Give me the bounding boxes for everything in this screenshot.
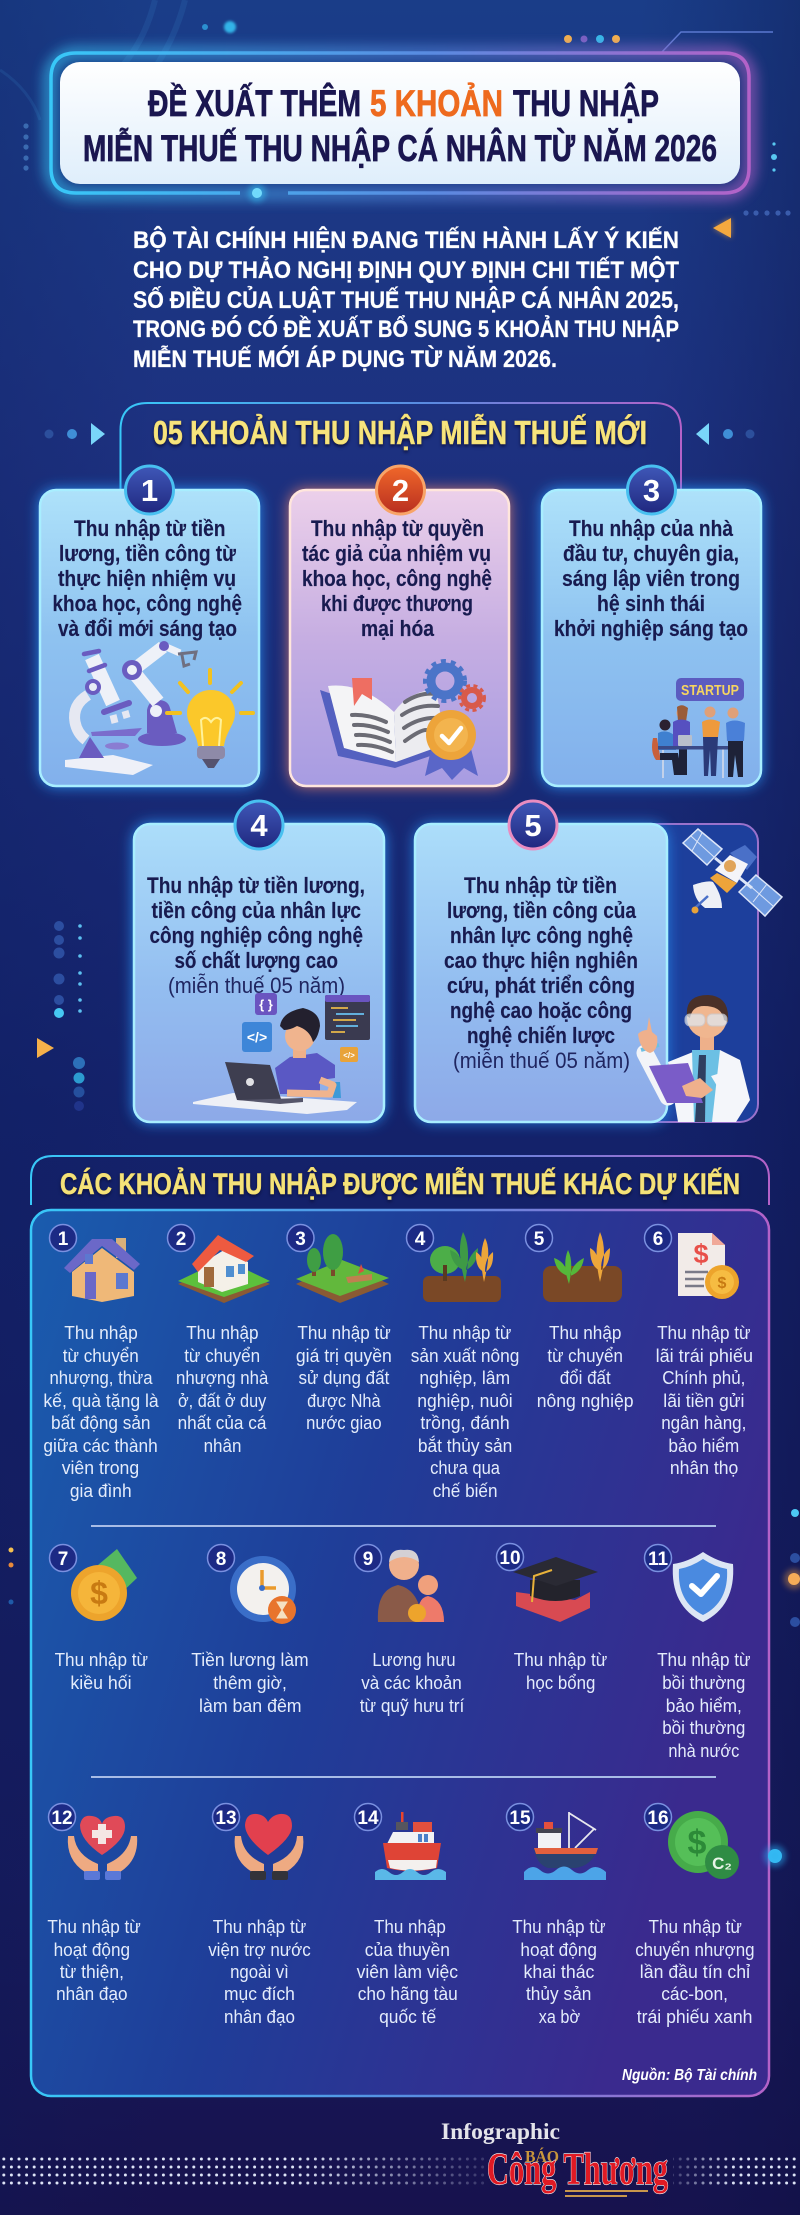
badge 5: 5 [524, 808, 542, 843]
text [176, 1323, 269, 1456]
icon: programmer at laptop: { } [259, 997, 273, 1012]
icon: programmer at laptop: </> [343, 1051, 355, 1060]
text 3: đầu tư, chuyên gia, [563, 541, 739, 566]
icon: left arrow marker [44, 423, 105, 445]
text: làm ban đêm [199, 1696, 302, 1716]
decorative dots, left of row 2 [37, 921, 85, 1111]
number 1: 1 [58, 1229, 69, 1250]
icon: ship on waves [375, 1812, 446, 1880]
number 2 [168, 1224, 194, 1252]
text [411, 1323, 519, 1501]
text: hoạt động [520, 1940, 597, 1960]
text 2: mại hóa [361, 616, 435, 641]
badge 1: 1 [141, 473, 158, 508]
icon: right arrow marker [696, 423, 754, 445]
decorative lines and dots, top area [0, 0, 791, 216]
icon: document with coin: $ [718, 1275, 727, 1292]
number 12 [48, 1804, 76, 1830]
text: xa bờ [539, 2007, 580, 2027]
text: chưa qua [430, 1458, 501, 1478]
text: Thu nhập từ [213, 1917, 306, 1937]
text: Thu nhập [374, 1917, 446, 1937]
logo: Báo Công Thương [487, 2143, 668, 2197]
text: sử dụng đất [298, 1368, 389, 1388]
text: khai thác [524, 1962, 594, 1982]
text 5: nghệ chiến lược [467, 1023, 615, 1048]
text: từ chuyển [63, 1346, 139, 1366]
text: Thu nhập từ [657, 1323, 750, 1343]
icon: shield with check [673, 1552, 733, 1622]
text [514, 1650, 607, 1693]
text: kiều hối [70, 1673, 132, 1693]
text [47, 1917, 141, 2004]
text 4: số chất lượng cao [174, 948, 338, 973]
text: Thu nhập [64, 1323, 138, 1343]
heading: 05 new exemptions: 05 KHOẢN THU NHẬP MIỄN THUẾ MỚI [153, 414, 647, 451]
icon: pensioners with coin [378, 1550, 444, 1622]
item 7 [50, 1544, 148, 1693]
text: cho hãng tàu [358, 1984, 458, 2004]
icon: scientist [638, 995, 750, 1122]
text: giá trị quyền [296, 1346, 392, 1366]
text 1 [52, 516, 242, 641]
text 4: công nghiệp công nghệ [150, 923, 363, 948]
item 9 [354, 1544, 464, 1716]
panel: exemption 1 [39, 466, 260, 787]
text: nhân đạo [224, 2007, 295, 2027]
number 9 [354, 1544, 382, 1572]
text: từ chuyển [184, 1346, 260, 1366]
text: nhân [204, 1436, 241, 1456]
text: nhượng, thừa [50, 1368, 153, 1388]
item 15 [506, 1804, 606, 2027]
text: Thu nhập từ [55, 1650, 148, 1670]
icon: land with trees [296, 1234, 389, 1303]
text: ở, đất ở duy [178, 1391, 266, 1411]
intro paragraph: BỘ TÀI CHÍNH HIỆN ĐANG TIẾN HÀNH LẤY Ý KIẾN [133, 226, 679, 254]
text: mục đích [224, 1984, 295, 2004]
number 8 [208, 1544, 234, 1572]
text 2: tác giả của nhiệm vụ [302, 541, 491, 566]
number 16 [644, 1804, 672, 1830]
text 3: Thu nhập của nhà [569, 516, 734, 541]
text: từ quỹ hưu trí [360, 1696, 464, 1716]
text: Thu nhập từ [648, 1917, 742, 1937]
title frame [50, 53, 750, 202]
number 8: 8 [216, 1549, 226, 1570]
title text: ĐỀ XUẤT THÊM [148, 82, 361, 124]
text 5: nhân lực công nghệ [450, 923, 633, 948]
text: từ chuyển [547, 1346, 623, 1366]
text: học bổng [526, 1673, 595, 1693]
text: Chính phủ, [662, 1368, 745, 1388]
icon: document with coin [678, 1233, 739, 1299]
text 1: Thu nhập từ tiền [74, 516, 226, 541]
text: và các khoản [361, 1673, 462, 1693]
text: bảo hiểm, [666, 1696, 742, 1716]
number 14: 14 [357, 1808, 379, 1829]
item 11 [644, 1544, 750, 1761]
text [512, 1917, 606, 2027]
icon: programmer at laptop: </> [247, 1029, 267, 1045]
text: chế biến [433, 1481, 498, 1501]
text 2: Thu nhập từ quyền [311, 516, 484, 541]
number 3: 3 [295, 1229, 306, 1250]
text: nghiệp, nuôi [417, 1391, 513, 1411]
footer dot band [2, 2158, 796, 2184]
number 6: 6 [653, 1229, 663, 1250]
text 3: sáng lập viên trong [562, 566, 740, 591]
intro paragraph: CHO DỰ THẢO NGHỊ ĐỊNH QUY ĐỊNH CHI TIẾT MỘT [133, 255, 679, 284]
icon: soil with crops [543, 1232, 622, 1302]
item 4 [406, 1224, 519, 1501]
icon: fishing boat [524, 1812, 606, 1880]
text 5: cứu, phát triển công [447, 973, 635, 998]
text: lãi tiền gửi [663, 1391, 744, 1411]
icon: startup sign and team: STARTUP [681, 682, 739, 699]
logo: Báo Công Thương: BÁO [525, 2147, 559, 2166]
text [360, 1650, 464, 1716]
item 16 [635, 1804, 755, 2027]
text [191, 1650, 309, 1716]
icon: orange arrow right of intro [713, 218, 731, 238]
text: Thu nhập từ [47, 1917, 141, 1937]
text [43, 1323, 160, 1501]
text: Tiền lương làm [191, 1650, 309, 1670]
source note: Nguồn: Bộ Tài chính [622, 2067, 757, 2084]
badge 4 [235, 801, 283, 849]
intro paragraph: MIỄN THUẾ MỚI ÁP DỤNG TỪ NĂM 2026. [133, 344, 557, 373]
text: Thu nhập từ [512, 1917, 606, 1937]
text 5 [444, 873, 638, 1073]
text: từ thiện, [60, 1962, 124, 1982]
icon: coin and banknote [71, 1549, 137, 1621]
item 12 [47, 1804, 141, 2004]
number 6 [644, 1224, 672, 1252]
number 5 [526, 1224, 552, 1252]
item 10 [496, 1544, 607, 1693]
text: của thuyền [365, 1940, 450, 1960]
text 1: thực hiện nhiệm vụ [58, 566, 236, 591]
number 4 [406, 1224, 434, 1252]
text 1: lương, tiền công từ [59, 541, 236, 566]
text 1: và đổi mới sáng tạo [58, 616, 237, 641]
item 1 [43, 1224, 160, 1501]
text: kế, quà tặng là [43, 1391, 160, 1411]
icon: green coin with C2 [668, 1811, 739, 1879]
text [635, 1917, 755, 2027]
intro paragraph: TRONG ĐÓ CÓ ĐỀ XUẤT BỔ SUNG 5 KHOẢN THU NHẬP [133, 314, 679, 343]
text: bảo hiểm [668, 1436, 739, 1456]
text: nhà nước [668, 1741, 739, 1761]
text: giữa các thành [43, 1436, 158, 1456]
text: bất động sản [51, 1413, 150, 1433]
panel: exemption 2 [289, 466, 510, 787]
icon: green coin with C2: $ [688, 1824, 707, 1862]
text: bồi thường [662, 1673, 745, 1693]
number 10 [496, 1544, 524, 1570]
number 16: 16 [647, 1808, 669, 1829]
number 11 [644, 1544, 672, 1572]
text 5: Thu nhập từ tiền [464, 873, 617, 898]
text [296, 1323, 392, 1433]
text: Thu nhập [549, 1323, 621, 1343]
intro paragraph [133, 226, 679, 373]
badge 2: 2 [392, 473, 409, 508]
text 3 [554, 516, 748, 641]
item 5 [526, 1224, 634, 1411]
number 14 [354, 1804, 382, 1830]
item 6 [644, 1224, 753, 1478]
number 2: 2 [176, 1229, 186, 1250]
text: các-bon, [661, 1984, 728, 2004]
text: Thu nhập từ [514, 1650, 607, 1670]
text 4: tiền công của nhân lực [152, 898, 361, 923]
text: trái phiếu xanh [637, 2007, 752, 2027]
text: viên trong [62, 1458, 139, 1478]
icon: document with coin: $ [693, 1239, 709, 1269]
icon: graduation cap on book [513, 1557, 598, 1622]
text: Thu nhập từ [297, 1323, 391, 1343]
text: thêm giờ, [213, 1673, 287, 1693]
text 5: lương, tiền công của [447, 898, 637, 923]
title text: THU NHẬP [513, 82, 659, 124]
icon: farm soil with plants [423, 1232, 501, 1302]
panel: exemption 4 [133, 801, 385, 1123]
badge 5 [509, 801, 557, 849]
number 12: 12 [51, 1808, 73, 1829]
text: bắt thủy sản [418, 1435, 512, 1456]
number 13 [212, 1804, 240, 1830]
text [537, 1323, 634, 1411]
text: chuyển nhượng [635, 1940, 755, 1960]
item 3 [287, 1224, 392, 1433]
text: Thu nhập từ [418, 1323, 511, 1343]
text [656, 1323, 753, 1478]
text: nhân thọ [670, 1458, 738, 1478]
text: đổi đất [560, 1368, 611, 1388]
text [357, 1917, 458, 2027]
text 4 [147, 873, 365, 998]
footer label: Infographic: Infographic [441, 2119, 560, 2144]
text: lần đầu tín chỉ [640, 1962, 750, 1982]
text: quốc tế [379, 2007, 436, 2027]
icon: startup sign and team [652, 678, 745, 778]
badge 3 [628, 466, 676, 514]
title text [83, 82, 717, 169]
text 2 [302, 516, 492, 641]
icon: hands with medical heart [68, 1816, 137, 1880]
text: nhượng nhà [176, 1368, 269, 1388]
text 5: cao thực hiện nghiên [444, 948, 638, 973]
text: ngoài vì [230, 1962, 289, 1982]
badge 3: 3 [643, 473, 660, 508]
text: nông nghiệp [537, 1391, 634, 1411]
number 15 [506, 1804, 534, 1830]
icon: open book, gears, award [320, 661, 484, 780]
icon: hands with heart [235, 1814, 303, 1880]
item 13 [208, 1804, 311, 2027]
text 2: khi được thương [321, 591, 473, 616]
text 4: Thu nhập từ tiền lương, [147, 873, 365, 898]
text [208, 1917, 311, 2027]
text: viện trợ nước [208, 1940, 311, 1960]
text: Thu nhập [186, 1323, 259, 1343]
text: bồi thường [662, 1718, 745, 1738]
text: được Nhà [307, 1391, 381, 1411]
text: ngân hàng, [661, 1413, 746, 1433]
icon: programmer at laptop [193, 993, 370, 1114]
text 5: nghệ cao hoặc công [450, 998, 632, 1023]
text 3: khởi nghiệp sáng tạo [554, 616, 748, 641]
icon: green coin with C2: C₂ [712, 1854, 732, 1873]
panel: exemption 5 [414, 801, 782, 1123]
icon: microscope, robot arm, light bulb [65, 641, 253, 775]
logo: Báo Công Thương: Công Thương [487, 2143, 668, 2194]
item 8 [191, 1544, 309, 1716]
heading tab outline: 05 new exemptions [120, 403, 681, 490]
number 15: 15 [509, 1808, 531, 1829]
text: viên làm việc [357, 1962, 458, 1982]
panel: exemption 3 [541, 466, 762, 787]
text: gia đình [70, 1481, 132, 1501]
intro paragraph: SỐ ĐIỀU CỦA LUẬT THUẾ THU NHẬP CÁ NHÂN 2025, [133, 285, 679, 314]
text: nhân đạo [56, 1984, 128, 2004]
heading tab outline: other exemptions [31, 1156, 769, 1205]
text 3: hệ sinh thái [597, 591, 705, 616]
text 2: khoa học, công nghệ [302, 566, 492, 591]
icon: clock with hourglass [230, 1556, 296, 1624]
badge 2 [376, 466, 424, 514]
badge 1 [126, 466, 174, 514]
number 7 [50, 1544, 76, 1572]
text: Lương hưu [372, 1650, 456, 1670]
text: Thu nhập từ [657, 1650, 750, 1670]
text [55, 1650, 148, 1693]
text 4: (miễn thuế 05 năm) [168, 973, 345, 998]
divider [91, 1525, 716, 1527]
badge 4: 4 [250, 808, 268, 843]
text: sản xuất nông [411, 1346, 519, 1366]
text: lãi trái phiếu [656, 1346, 753, 1366]
number 10: 10 [499, 1548, 521, 1569]
number 5: 5 [534, 1229, 545, 1250]
icon: house [64, 1238, 140, 1302]
number 7: 7 [58, 1549, 68, 1570]
text: nghiệp, lâm [419, 1368, 510, 1388]
number 11: 11 [648, 1549, 668, 1570]
number 9: 9 [363, 1549, 373, 1570]
number 4: 4 [415, 1229, 426, 1250]
item 14 [354, 1804, 458, 2027]
text: nước giao [306, 1413, 382, 1433]
decorative side glows [8, 1509, 800, 1867]
text [657, 1650, 750, 1761]
icon: satellite [683, 829, 782, 916]
icon: house on grass [178, 1235, 270, 1303]
number 1 [50, 1224, 76, 1252]
number 13: 13 [215, 1808, 237, 1829]
divider [91, 1776, 716, 1778]
title text: 5 KHOẢN [370, 83, 503, 124]
icon: coin and banknote: $ [90, 1575, 108, 1611]
number 3 [287, 1224, 314, 1252]
text 1: khoa học, công nghệ [52, 591, 242, 616]
text: hoạt động [54, 1940, 130, 1960]
text 5: (miễn thuế 05 năm) [453, 1048, 630, 1073]
text: nhất của cá [178, 1413, 267, 1433]
panel: other exemptions [31, 1210, 769, 2096]
text: thủy sản [526, 1984, 591, 2004]
text: trồng, đánh [420, 1413, 510, 1433]
item 2 [168, 1224, 270, 1456]
